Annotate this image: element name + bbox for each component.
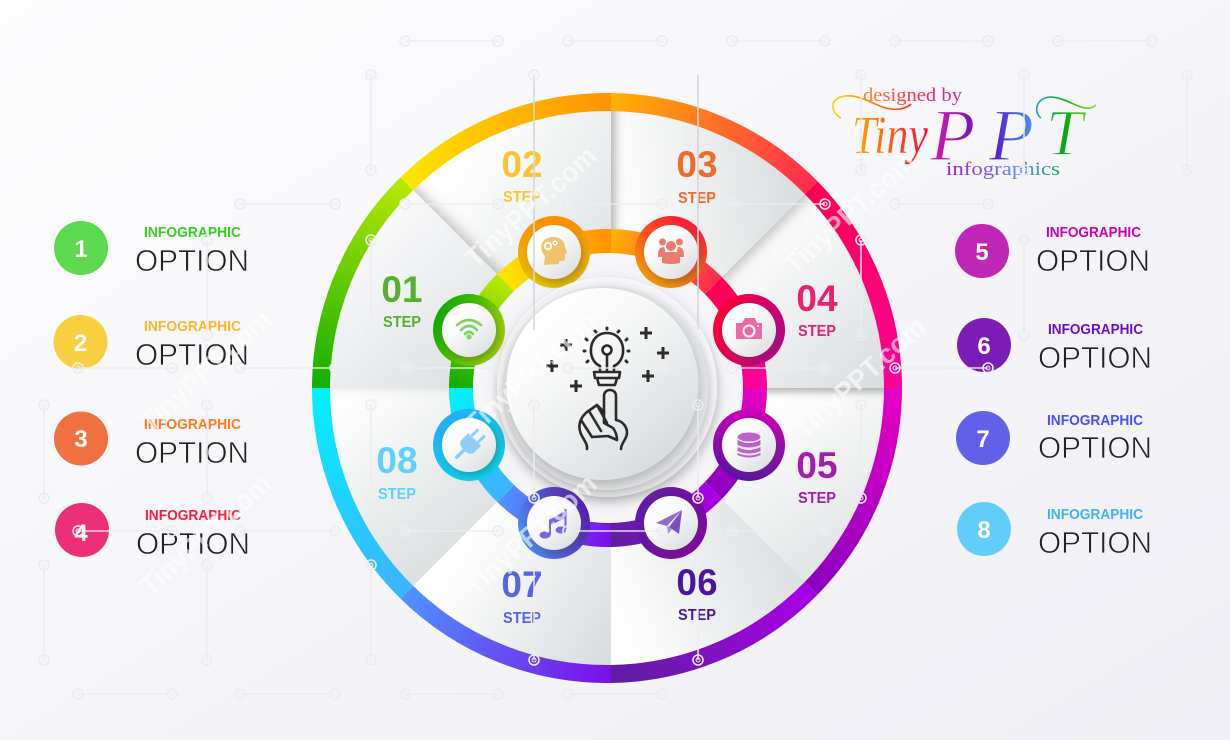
watermarks: TinyPPT.com [459, 140, 603, 274]
step 02 label: 02 [501, 144, 543, 185]
watermarks: TinyPPT.com [778, 146, 922, 280]
legend item 7: 7 [976, 426, 990, 453]
legend item 2 [54, 315, 249, 372]
legend item 3: INFOGRAPHIC [144, 417, 242, 433]
legend item 6: INFOGRAPHIC [1048, 322, 1143, 338]
step 05 label [796, 445, 838, 507]
icon: plug [449, 426, 488, 465]
icon: wifi [457, 320, 481, 339]
step 04 label [796, 278, 838, 340]
icon: camera [736, 318, 762, 339]
logo: designed by TinyPPT infographics: Tiny [852, 105, 928, 165]
outer gradient ring [321, 102, 893, 674]
node 8: plug [433, 409, 505, 481]
node 3: people [635, 216, 707, 288]
step 02 label: STEP [503, 189, 541, 206]
logo: designed by TinyPPT infographics [833, 85, 1096, 180]
step 05 label: STEP [798, 490, 836, 507]
legend item 1 [54, 221, 249, 278]
legend item 2: INFOGRAPHIC [144, 319, 242, 335]
step 08 label [376, 440, 418, 503]
watermarks: TinyPPT.com [134, 304, 278, 438]
legend item 8: OPTION [1038, 525, 1152, 560]
legend item 1: OPTION [135, 243, 249, 278]
icon: paper plane [656, 510, 682, 534]
icon: head [541, 237, 567, 265]
step 04 label: STEP [798, 323, 836, 340]
watermarks: TinyPPT.com [459, 468, 603, 602]
legend item 8: INFOGRAPHIC [1047, 507, 1143, 523]
logo: designed by TinyPPT infographics: T [1046, 97, 1087, 170]
icon: database [738, 432, 760, 458]
legend item 1: INFOGRAPHIC [144, 225, 242, 241]
node 2: head with gears [518, 216, 590, 288]
step 04 label: 04 [796, 278, 838, 319]
step 06 label: STEP [678, 607, 716, 624]
step 07 label: STEP [503, 610, 541, 627]
node 6: paper plane [635, 487, 707, 559]
step 01 label: STEP [383, 314, 421, 331]
step 06 label [676, 562, 718, 624]
circular diagram [312, 93, 902, 683]
legend item 5: OPTION [1036, 243, 1150, 278]
step 07 label: 07 [501, 564, 543, 605]
legend item 6: OPTION [1038, 340, 1152, 375]
step 01 label: 01 [381, 269, 423, 310]
legend item 2: 2 [74, 330, 87, 357]
inner gradient ring [461, 241, 755, 535]
step 02 label [501, 144, 543, 206]
right legend [955, 224, 1152, 560]
legend item 5 [955, 224, 1150, 278]
step 08 label: 08 [376, 440, 418, 481]
legend item 4: INFOGRAPHIC [145, 508, 241, 524]
watermarks: TinyPPT.com [788, 311, 932, 445]
step 01 label [381, 269, 423, 331]
legend item 7 [956, 411, 1152, 465]
logo: designed by TinyPPT infographics: infographics [946, 159, 1060, 180]
node 5: database [713, 409, 785, 481]
icon: people [658, 238, 684, 264]
legend item 8 [957, 502, 1152, 560]
step labels [376, 144, 838, 627]
legend item 3 [54, 412, 249, 470]
left legend [54, 221, 250, 561]
legend item 3: OPTION [135, 435, 249, 470]
watermarks: TinyPPT.com [459, 306, 603, 440]
center hub [497, 277, 717, 497]
legend item 8: 8 [977, 517, 991, 544]
step 03 label: 03 [676, 144, 718, 185]
node 7: music notes [518, 487, 590, 559]
icon: music notes [540, 509, 566, 538]
legend item 4 [55, 503, 250, 561]
step 03 label: STEP [678, 190, 716, 207]
legend item 2: OPTION [135, 337, 249, 372]
inner hub background [472, 252, 744, 524]
step 08 label: STEP [378, 486, 416, 503]
step 06 label: 06 [676, 562, 718, 603]
icon: plus signs [546, 327, 669, 392]
legend item 3: 3 [74, 426, 88, 453]
logo: designed by TinyPPT infographics: PP [929, 95, 1034, 177]
legend item 5: 5 [975, 239, 989, 266]
legend item 7: OPTION [1038, 430, 1152, 465]
watermarks: TinyPPT.com [134, 468, 278, 602]
step 05 label: 05 [796, 445, 838, 486]
node 4: camera [713, 294, 785, 366]
legend item 4: OPTION [136, 526, 250, 561]
legend item 6 [957, 318, 1152, 375]
legend item 5: INFOGRAPHIC [1046, 225, 1141, 241]
legend item 4: 4 [74, 520, 88, 547]
legend item 6: 6 [977, 333, 991, 360]
logo: designed by TinyPPT infographics: designed by [863, 85, 963, 106]
paper wedges [312, 93, 902, 683]
step 03 label [676, 144, 718, 207]
watermarks [134, 140, 932, 602]
legend item 7: INFOGRAPHIC [1047, 413, 1143, 429]
legend item 1: 1 [74, 236, 88, 263]
node 1: wifi [433, 294, 505, 366]
step 07 label [501, 564, 543, 627]
icon: light bulb and pointing hand [579, 328, 629, 449]
